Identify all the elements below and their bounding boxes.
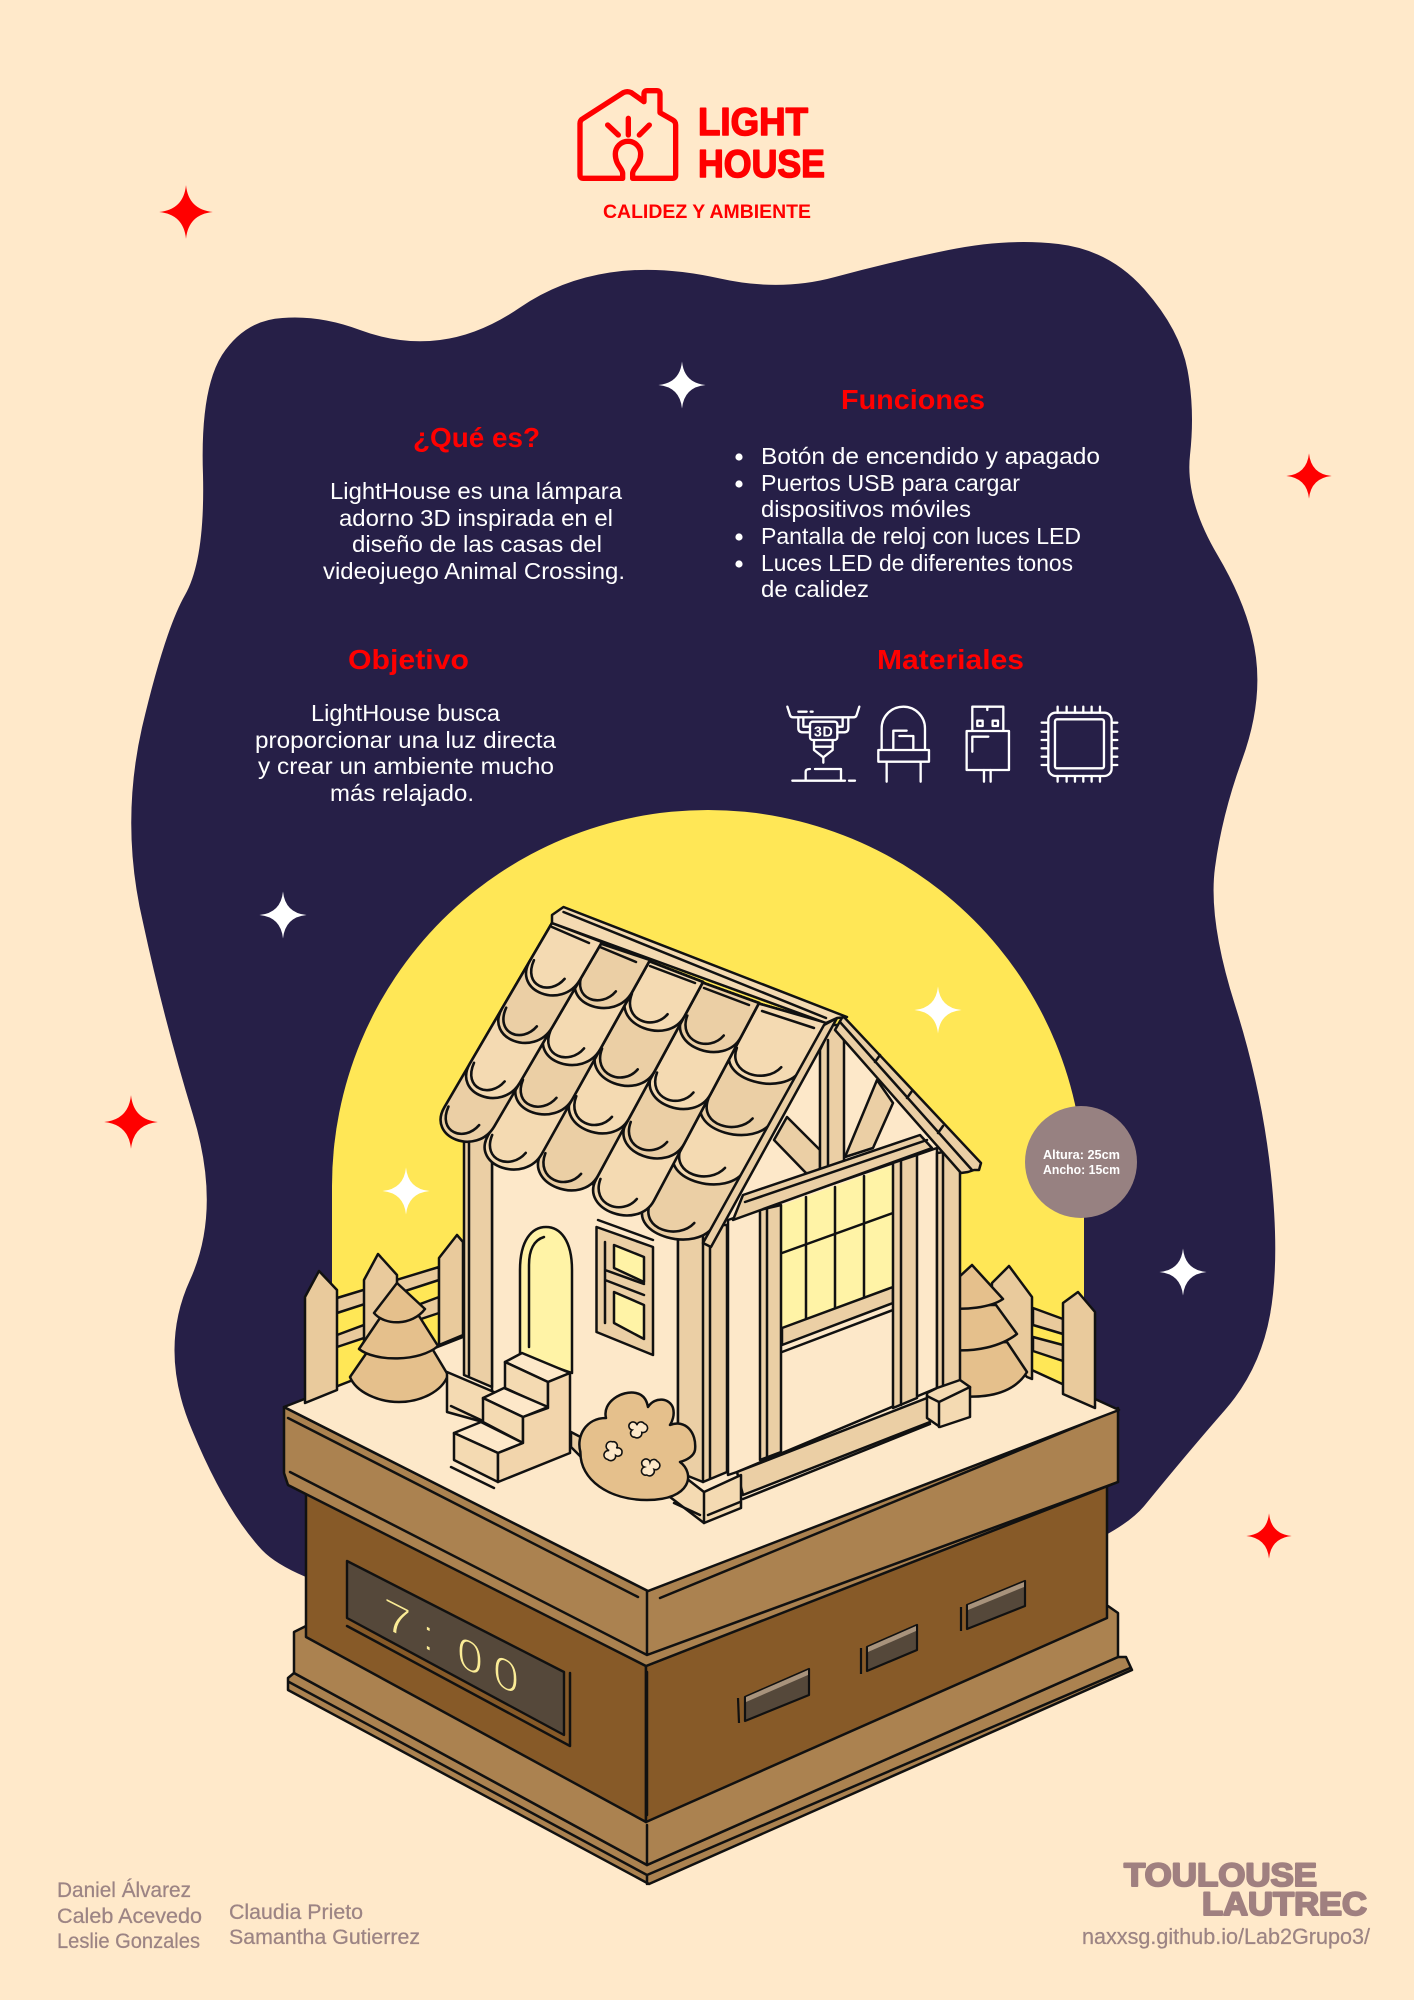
section: que es [323, 422, 625, 584]
text block: que es: diseño de las casas del [352, 531, 602, 557]
bottom beam [737, 1398, 930, 1495]
small window [596, 1220, 653, 1355]
logo wordmark [698, 101, 825, 186]
icon: LED [878, 707, 929, 782]
left post [464, 1130, 492, 1387]
Toulouse Lautrec logo: LAUTREC [1202, 1886, 1367, 1922]
text block: objetivo: LightHouse busca [311, 700, 501, 726]
authors column 1: Leslie Gonzales [57, 1930, 200, 1953]
clock display [347, 1561, 570, 1746]
section: materiales [787, 644, 1117, 782]
logo icon: house with light bulb [580, 91, 676, 178]
base body left [306, 1490, 646, 1822]
heading: materiales: Materiales [877, 644, 1024, 675]
left tree [350, 1283, 448, 1402]
icon: 3D printer [787, 707, 859, 781]
ridge beam [552, 907, 847, 1023]
text block: que es [323, 478, 625, 584]
authors column 2 [229, 1901, 420, 1949]
logo wordmark: HOUSE [698, 143, 825, 186]
red stars [104, 185, 1332, 1559]
authors column 1: Caleb Acevedo [57, 1905, 202, 1928]
base plinth [294, 1606, 1118, 1865]
right rafter [835, 1016, 981, 1173]
shingle column 2 [475, 942, 650, 1177]
yellow glow dome [332, 810, 1084, 1450]
bullet list: funciones: dispositivos móviles [761, 496, 971, 522]
clock digits: 0 [457, 1626, 483, 1689]
section: objetivo [255, 644, 557, 806]
bullet list: funciones: Botón de encendido y apagado [761, 443, 1100, 469]
roof shingles [431, 923, 827, 1247]
lamp illustration [284, 907, 1132, 1884]
wall posts [760, 1150, 960, 1460]
right tree [945, 1265, 1027, 1397]
Toulouse Lautrec logo: TOULOUSE [1124, 1857, 1317, 1893]
dimensions badge: Ancho: 15cm [1043, 1163, 1120, 1177]
icon: 3D printer: 3D [814, 725, 833, 741]
tie beam [733, 1135, 932, 1220]
authors column 1 [57, 1879, 202, 1953]
night sky blob [131, 242, 1275, 1632]
front rafter [703, 1018, 837, 1247]
corner post [678, 1225, 727, 1482]
right wall [728, 1148, 937, 1475]
gable struts [774, 1025, 893, 1175]
clock digits [383, 1588, 519, 1707]
house [431, 907, 981, 1523]
bullet list: funciones: Pantalla de reloj con luces LED [761, 523, 1081, 549]
left wall [492, 1130, 678, 1490]
door [520, 1227, 572, 1373]
left fence [305, 1235, 463, 1403]
logo: LightHouse [580, 91, 825, 223]
large window [782, 1165, 893, 1328]
shingle column 3 [529, 960, 703, 1199]
dimensions badge: Altura: 25cm [1043, 1148, 1120, 1162]
text block: que es: LightHouse es una lámpara [330, 478, 623, 504]
material icons [787, 707, 1117, 782]
logo wordmark: LIGHT [698, 101, 808, 144]
shingle column 1 [431, 923, 602, 1149]
text block: que es: videojuego Animal Crossing. [323, 558, 625, 584]
right post base [927, 1380, 970, 1427]
heading: funciones: Funciones [841, 384, 985, 415]
authors column 1: Daniel Álvarez [57, 1879, 191, 1902]
heading: objetivo: Objetivo [348, 644, 469, 675]
right fence and tree [945, 1265, 1095, 1408]
authors column 2: Samantha Gutierrez [229, 1926, 420, 1949]
icon: microchip [1042, 707, 1117, 782]
Toulouse Lautrec logo [1124, 1857, 1367, 1922]
bush flowers [604, 1422, 660, 1476]
text block: objetivo: y crear un ambiente mucho [258, 753, 554, 779]
corner post base [670, 1475, 741, 1523]
window sill [782, 1287, 893, 1345]
icon: USB connector [967, 707, 1009, 782]
text block: objetivo: más relajado. [330, 780, 474, 806]
clock digits: 7 [383, 1588, 412, 1652]
usb ports [738, 1581, 1025, 1723]
white stars [259, 361, 1207, 1296]
dimensions badge [1025, 1106, 1137, 1218]
wooden base [284, 1337, 1132, 1884]
bullet list: funciones: Luces LED de diferentes tonos [761, 550, 1073, 576]
clock digits: 0 [493, 1644, 519, 1707]
stairs [447, 1353, 570, 1488]
base foot [288, 1657, 1132, 1884]
shingle column 4 [584, 982, 759, 1223]
text block: objetivo [255, 700, 557, 806]
project url: naxxsg.github.io/Lab2Grupo3/ [1082, 1924, 1371, 1949]
bullet list: funciones: Puertos USB para cargar [761, 470, 1020, 496]
text block: que es: adorno 3D inspirada en el [339, 505, 613, 531]
clock digits: : [422, 1608, 435, 1664]
heading: que es: ¿Qué es? [413, 422, 540, 453]
wall beam stub [571, 1432, 590, 1458]
section: funciones [735, 384, 1100, 602]
base top band [284, 1407, 1118, 1666]
bush [579, 1393, 695, 1500]
authors column 2: Claudia Prieto [229, 1901, 363, 1924]
text block: objetivo: proporcionar una luz directa [255, 727, 557, 753]
bullet list: funciones: de calidez [761, 576, 869, 602]
bullet list: funciones [735, 443, 1100, 602]
base body right [646, 1484, 1107, 1822]
shingle column 5 [632, 1003, 827, 1247]
tagline: CALIDEZ Y AMBIENTE [603, 202, 811, 223]
gable back [715, 1020, 963, 1235]
table top [284, 1337, 1119, 1591]
